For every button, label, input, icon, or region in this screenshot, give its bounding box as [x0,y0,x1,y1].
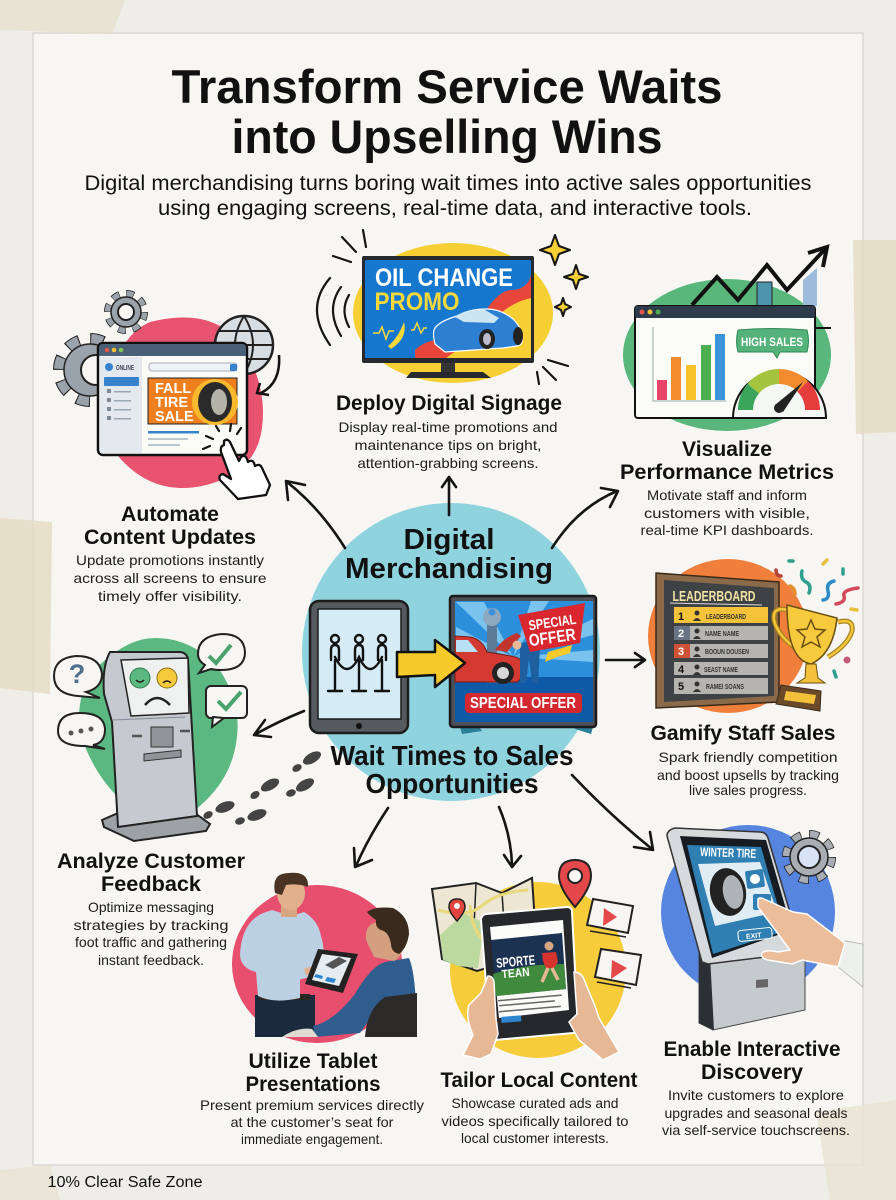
title: into Upselling Wins [232,110,662,163]
heading: Deploy Digital Signage [336,392,562,415]
heading: Analyze Customer [57,850,245,873]
body text: Showcase curated ads and [452,1095,618,1111]
heading: Visualize [682,438,772,461]
heading: Tailor Local Content [440,1069,638,1092]
subtitle [84,172,812,220]
heading: Automate [121,503,219,526]
icon: touchscreen kiosk: EXIT [746,932,763,941]
body text: across all screens to ensure [74,570,267,586]
body text: attention-grabbing screens. [358,455,538,471]
body text: immediate engagement. [241,1131,383,1147]
body text: local customer interests. [461,1130,609,1146]
icon: content dashboard [60,294,279,499]
body text: via self-service touchscreens. [662,1122,850,1138]
body text: foot traffic and gathering [75,934,227,950]
heading: Discovery [701,1061,803,1084]
icon: content dashboard: TIRE [155,395,188,411]
panel: gamify staff sales [648,559,858,798]
icon: tablet with queue [310,601,408,733]
panel: analyze customer feedback [54,634,323,968]
arrow: to signage [442,477,456,515]
body text [662,1087,850,1138]
body text: videos specifically tailored to [442,1113,629,1129]
icon: special offer screen: SPECIAL OFFER [470,695,576,712]
icon: leaderboard and trophy: NAME NAME [705,631,739,638]
heading [246,1050,380,1096]
hub heading [345,524,553,585]
heading [664,1038,840,1084]
icon: special offer screen: SPECIAL [527,611,578,633]
hub heading: Digital [404,524,494,556]
body text [74,899,228,968]
body text: strategies by tracking [74,917,228,933]
hub caption [330,740,574,799]
icon: leaderboard and trophy: 3 [678,646,684,658]
heading [84,503,256,549]
body text [640,487,814,538]
body text: timely offer visibility. [98,588,242,604]
body text [657,749,839,798]
hub caption: Wait Times to Sales [330,740,574,771]
body text [338,419,558,471]
hub heading: Merchandising [345,553,553,585]
hub circle [302,503,600,801]
icon: digital signage screen: PROMO [374,288,460,316]
body text: Display real-time promotions and [338,419,558,435]
footer note: 10% Clear Safe Zone [48,1174,202,1191]
body text: customers with visible, [644,505,810,521]
arrow: to interactive discovery [572,775,653,850]
icon: special offer screen [450,596,596,734]
body text: instant feedback. [98,952,204,968]
icon: content dashboard: ONLINE [116,365,134,372]
body text: maintenance tips on bright, [354,437,542,453]
icon: content dashboard: SALE [155,409,194,425]
body text: at the customer’s seat for [230,1114,394,1130]
heading: Utilize Tablet [248,1050,378,1073]
panel: enable interactive discovery [661,825,863,1138]
heading [620,438,834,484]
panel: central hub [302,503,600,801]
icon: leaderboard and trophy: RAMEI SOANS [706,684,744,691]
icon: dashboard: HIGH SALES [741,335,803,349]
body text [200,1097,424,1147]
body text: and boost upsells by tracking [657,767,839,783]
icon: leaderboard and trophy: 4 [678,664,685,676]
icon: content dashboard: FALL [155,381,191,397]
heading: Gamify Staff Sales [650,722,836,745]
icon: digital signage screen [317,230,588,384]
body text: upgrades and seasonal deals [664,1105,848,1121]
icon: leaderboard and trophy: 5 [678,681,684,693]
panel: deploy digital signage [317,230,588,471]
icon: yellow arrow [397,640,465,687]
heading: Feedback [101,873,201,896]
icon: leaderboard and trophy: 2 [678,628,684,640]
body text: Motivate staff and inform [647,487,807,503]
body text: real-time KPI dashboards. [640,522,814,538]
icon: leaderboard and trophy: LEADERBOARD [706,614,746,621]
icon: feedback kiosk: ? [69,659,85,689]
icon: leaderboard and trophy: LEADERBOARD [672,588,756,605]
body text: Update promotions instantly [76,552,264,568]
panel: tailor local content [432,860,641,1146]
body text: Invite customers to explore [668,1087,844,1103]
arrow: to automate [286,481,345,548]
body text: Spark friendly competition [658,749,838,765]
arrow: to gamify [606,653,645,667]
hub caption: Opportunities [366,768,538,799]
icon: leaderboard and trophy: SEAST NAME [704,667,738,674]
icon: leaderboard and trophy [648,559,858,713]
heading: Presentations [246,1073,380,1096]
icon: leaderboard and trophy: BOOUN DOUSEN [705,649,749,656]
heading: Content Updates [84,526,256,549]
panel: visualize performance metrics [620,247,834,538]
body text [74,552,267,604]
title [172,60,722,163]
subtitle: Digital merchandising turns boring wait times into active sales opportunities [84,172,812,195]
icon: feedback kiosk [54,634,323,841]
arrow: to local content [499,807,521,867]
heading: Enable Interactive [664,1038,840,1061]
panel: automate content updates [60,294,279,604]
icon: touchscreen kiosk [661,825,863,1030]
icon: dashboard [623,247,831,431]
body text: live sales progress. [689,782,807,798]
body text: Present premium services directly [200,1097,424,1113]
body text [442,1095,629,1146]
panel: utilize tablet presentations [200,873,424,1147]
subtitle: using engaging screens, real-time data, and interactive tools. [158,197,752,220]
icon: digital signage screen: OIL CHANGE [375,264,513,292]
arrow: to customer feedback [254,711,304,737]
heading [57,850,245,896]
icon: staff with tablet and customer [232,873,417,1043]
heading: Performance Metrics [620,461,834,484]
icon: special offer screen: OFFER [528,625,577,650]
icon: tablet with map and videos [432,860,641,1060]
body text: Optimize messaging [88,899,214,915]
title: Transform Service Waits [172,60,722,113]
icon: tablet with map and videos: SPORTE [496,952,536,971]
icon: tablet with map and videos: TEAN [501,965,530,981]
arrow: to metrics [552,488,618,548]
icon: leaderboard and trophy: 1 [678,611,684,623]
arrow: to tablet presentations [354,808,388,867]
icon: touchscreen kiosk: WINTER TIRE [700,845,756,861]
